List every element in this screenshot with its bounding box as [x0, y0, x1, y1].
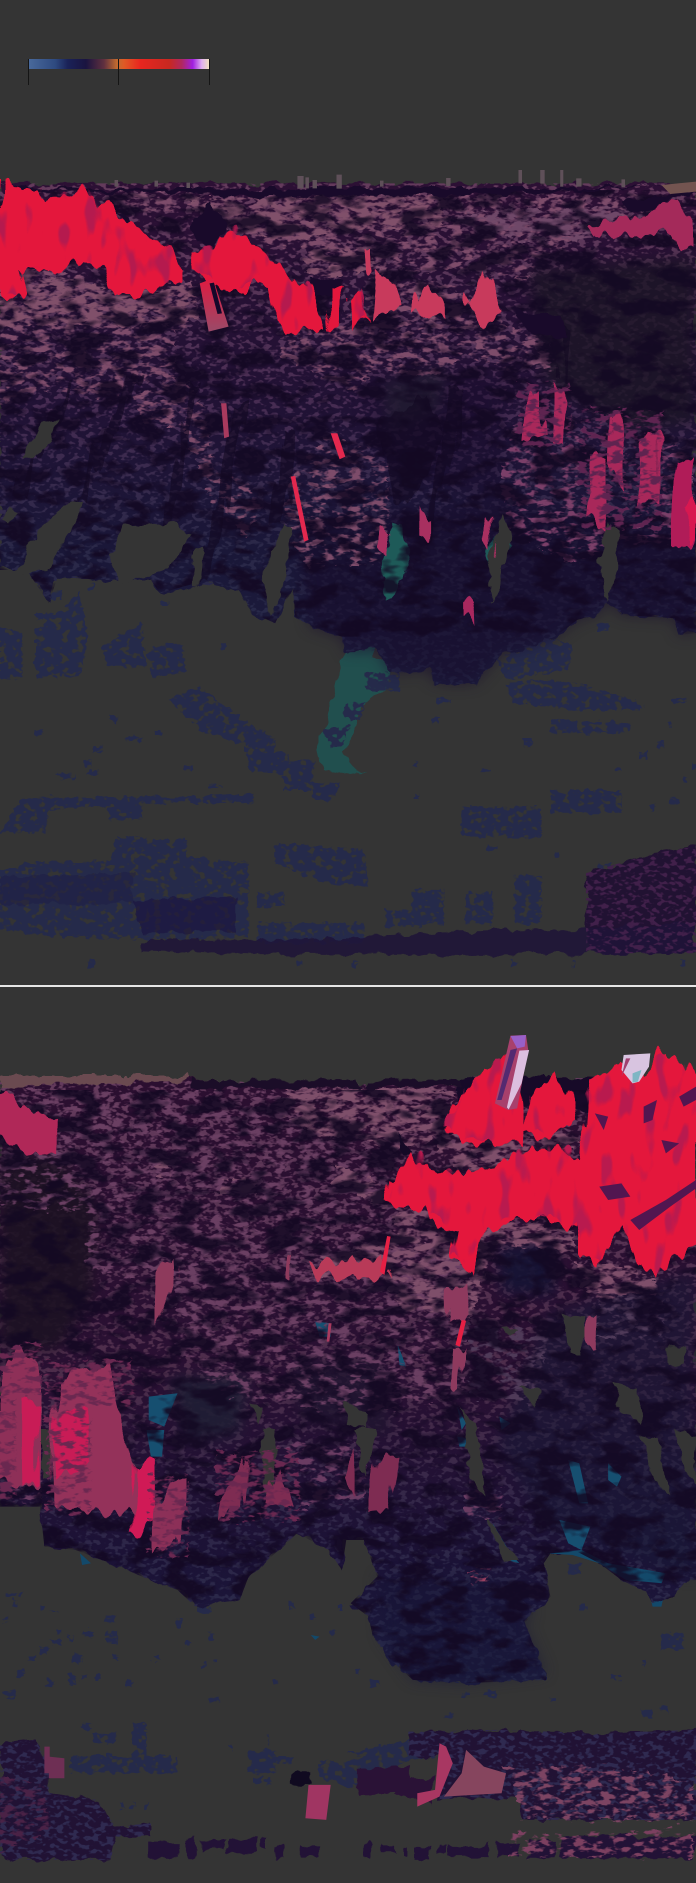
upper terrain teal pools [382, 523, 510, 600]
upper terrain near-black shadows [0, 185, 696, 337]
upper terrain navy blocks over water [324, 670, 400, 747]
upper terrain soft dark patches [293, 257, 696, 687]
colour scale legend [28, 59, 210, 85]
upper terrain bright red peaks [0, 178, 366, 335]
lower terrain denser mauve highlights [155, 1087, 657, 1320]
upper terrain mauve mottled ridges [0, 190, 696, 567]
upper terrain mottled shadows [0, 190, 696, 637]
upper terrain pink peak mottling [519, 383, 666, 530]
lower terrain mauve mottled ridges [0, 1090, 666, 1583]
lower terrain dark folds in red [595, 1087, 696, 1230]
lower terrain purple and white spire [495, 1035, 529, 1110]
lower terrain pink peaks [0, 1093, 595, 1553]
upper terrain horizon spikes [115, 170, 696, 194]
upper terrain pink peaks [364, 198, 696, 623]
legend gradient bar [28, 59, 209, 69]
lower terrain gray gaps [40, 1313, 696, 1560]
panel: lower terrain map [0, 1035, 696, 1860]
lower terrain foreground row highlights [510, 1830, 696, 1857]
lower terrain solid mass [0, 1073, 696, 1683]
upper terrain sparse low-value blocks [0, 583, 696, 967]
pink block [305, 1785, 331, 1820]
lower terrain foreground speckle [0, 1730, 696, 1860]
lower terrain foreground mauve mounds [0, 1763, 696, 1853]
upper terrain thin red needles [221, 403, 345, 542]
upper terrain gray gaps [2, 420, 619, 617]
lower terrain dark band behind peaks [457, 1077, 604, 1110]
upper terrain teal water [317, 643, 433, 775]
lower terrain pink peak mottling [0, 1343, 302, 1557]
lower terrain foreground pink blocks [44, 1743, 506, 1820]
upper terrain fine speckle [0, 183, 696, 685]
lower terrain sparse low-value blocks [2, 1563, 684, 1808]
upper terrain tall red stick [200, 278, 229, 332]
lower terrain fine speckle [0, 1073, 696, 1683]
upper terrain right block speckle [586, 847, 696, 953]
lower terrain soft dark patches [0, 1157, 696, 1683]
lower terrain foreground row of blobs [149, 1837, 696, 1860]
upper terrain denser mauve highlights [0, 193, 639, 327]
divider line between panels [0, 985, 696, 987]
lower terrain thin red needles [327, 1236, 466, 1347]
lower terrain mottled shadows [0, 1090, 696, 1697]
upper terrain solid mass [0, 183, 696, 685]
red peak streak shading [391, 1047, 696, 1278]
red peak streak shading [0, 178, 366, 335]
lower terrain bright red peaks [391, 1047, 696, 1278]
lower terrain tan horizon [0, 1076, 462, 1153]
lower terrain teal-blue water [80, 1553, 664, 1640]
lower terrain teal streaks [146, 1322, 666, 1583]
upper terrain diagonal dark strips [13, 327, 570, 583]
upper terrain dark right block and base strip [0, 847, 696, 955]
legend tick marks [28, 59, 210, 85]
panel: upper terrain map [0, 170, 696, 967]
lower terrain foreground band [0, 1730, 696, 1860]
lower terrain white peak top [621, 1053, 650, 1083]
